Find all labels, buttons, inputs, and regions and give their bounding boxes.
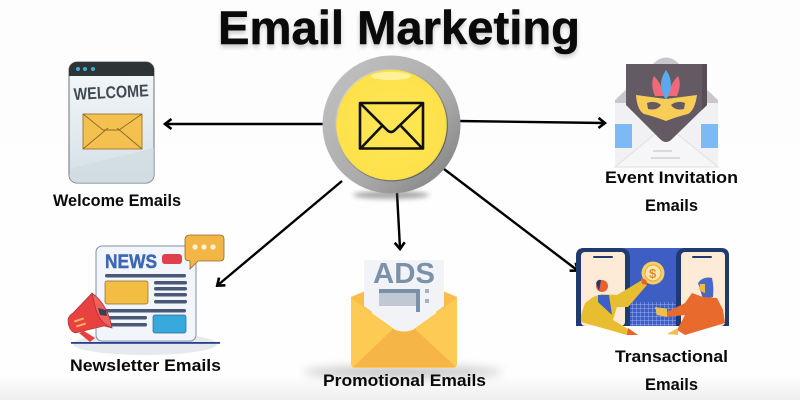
icon: coin: [642, 262, 664, 284]
central mail button: [322, 56, 460, 199]
icon: welcome email: [69, 62, 154, 183]
man: [581, 278, 647, 335]
label: transactional emails: [615, 347, 728, 394]
label: newsletter emails: Newsletter Emails: [70, 356, 221, 375]
label: event invitation emails: Emails: [645, 196, 698, 215]
icon: promotional envelope: [303, 258, 503, 377]
label: event invitation emails: Event Invitation: [605, 168, 738, 187]
arrow: to transactional emails: [444, 169, 577, 270]
icon: coin: $: [649, 266, 657, 281]
icon: envelope: [360, 103, 423, 148]
icon: event invitation: [615, 58, 718, 167]
label: transactional emails: Emails: [645, 375, 698, 394]
label: promotional emails: Promotional Emails: [323, 371, 486, 390]
arrow: to newsletter emails: [218, 181, 342, 285]
arrow: to promotional emails: [397, 193, 400, 248]
woman: [655, 278, 725, 335]
label: welcome emails: Welcome Emails: [53, 191, 181, 210]
icon: newsletter: NEWS: [105, 252, 157, 273]
title: Email Marketing: [218, 1, 580, 54]
arrow: to event invitation emails: [458, 121, 604, 123]
icon: newsletter: [68, 235, 224, 355]
icon: promotional envelope: ADS: [373, 258, 435, 290]
icon: transactional: [576, 248, 729, 335]
title: Email Marketing: [218, 4, 580, 57]
icon: speech bubble: [185, 235, 224, 269]
icon: welcome email: WELCOME: [73, 81, 149, 104]
arrow: to welcome emails: [166, 123, 325, 125]
icon: megaphone: [68, 293, 112, 342]
label: event invitation emails: [605, 168, 738, 215]
label: transactional emails: Transactional: [615, 347, 728, 366]
